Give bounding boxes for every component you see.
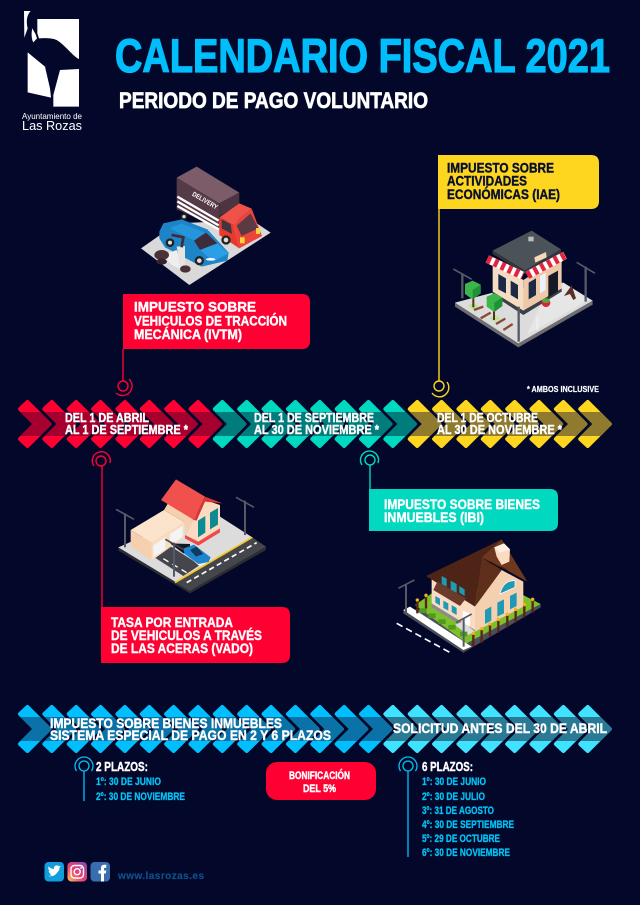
callout: vado xyxy=(101,466,290,663)
timeline: chevrons teal xyxy=(215,402,415,446)
period: abril a septiembre: AL 1 DE SEPTIEMBRE * xyxy=(65,422,189,437)
callout: IBI: IMPUESTO SOBRE BIENES xyxy=(384,496,540,512)
illustration: house with garage xyxy=(116,479,266,593)
period: abril a septiembre: DEL 1 DE ABRIL xyxy=(65,410,149,425)
period: octubre a noviembre: AL 30 DE NOVIEMBRE * xyxy=(437,422,563,437)
callout: IBI: INMUEBLES (IBI) xyxy=(384,509,484,525)
website: www.lasrozas.es xyxy=(117,871,204,882)
period: septiembre a noviembre xyxy=(254,410,380,437)
banner text: sistema especial xyxy=(50,715,331,743)
marker: IVTM xyxy=(116,379,132,396)
list: 6 plazos: 1º: 30 DE JUNIO xyxy=(422,776,486,788)
period: abril a septiembre xyxy=(65,410,189,437)
period: septiembre a noviembre: AL 30 DE NOVIEMBRE * xyxy=(254,422,380,437)
logo: Ayuntamiento de Las Rozas: Las Rozas xyxy=(22,118,82,133)
callout: IAE: ECONÓMICAS (IAE) xyxy=(447,185,560,202)
period: septiembre a noviembre: DEL 1 DE SEPTIEMBRE xyxy=(254,410,374,425)
list: 6 plazos: 2º: 30 DE JULIO xyxy=(422,791,485,803)
callout: vado: DE LAS ACERAS (VADO) xyxy=(111,640,253,656)
list: 2 plazos xyxy=(75,757,185,803)
list: 6 plazos: 3º: 31 DE AGOSTO xyxy=(422,805,494,817)
banner text: sistema especial: IMPUESTO SOBRE BIENES INMUEBLES xyxy=(50,715,282,731)
badge: bonificación: DEL 5% xyxy=(303,783,336,795)
illustration: chalet xyxy=(397,539,541,654)
callout: IVTM: VEHICULOS DE TRACCIÓN xyxy=(134,312,287,328)
callout: vado: DE VEHICULOS A TRAVÉS xyxy=(111,627,262,643)
illustration: shop xyxy=(453,231,595,347)
callout: IBI xyxy=(369,465,558,531)
list: 6 plazos xyxy=(399,757,514,859)
list: 2 plazos: 2º: 30 DE NOVIEMBRE xyxy=(96,791,185,803)
timeline: chevrons yellow xyxy=(410,402,610,446)
marker: IBI xyxy=(361,451,379,465)
banner text: sistema especial: SISTEMA ESPECIAL DE PAGO EN 2 Y 6 PLAZOS xyxy=(50,727,331,743)
list: 6 plazos: 6 PLAZOS: xyxy=(422,760,473,774)
badge: bonificación xyxy=(266,762,376,800)
marker: IAE xyxy=(432,381,449,397)
callout: IAE xyxy=(438,155,599,381)
icon: instagram xyxy=(68,862,87,882)
callout: IVTM: MECÁNICA (IVTM) xyxy=(134,326,242,342)
icon: facebook xyxy=(90,862,110,882)
icon: twitter xyxy=(44,862,64,882)
marker: vado xyxy=(92,452,110,466)
note: ambos inclusive: * AMBOS INCLUSIVE xyxy=(527,384,599,394)
callout: IAE: ACTIVIDADES xyxy=(447,172,527,188)
badge: bonificación: BONIFICACIÓN xyxy=(289,769,350,782)
timeline: chevrons red xyxy=(20,402,220,446)
list: 6 plazos: 4º: 30 DE SEPTIEMBRE xyxy=(422,819,514,831)
illustration: vehicles: DELIVERY xyxy=(191,191,219,211)
subtitle: PERIODO DE PAGO VOLUNTARIO xyxy=(119,88,428,113)
list: 2 plazos: 2 PLAZOS: xyxy=(96,760,148,774)
list: 2 plazos: 1º: 30 DE JUNIO xyxy=(96,776,161,788)
illustration: vehicles xyxy=(141,167,271,285)
banner text: solicitud: SOLICITUD ANTES DEL 30 DE ABRIL xyxy=(393,720,607,736)
timeline: chevrons light cyan xyxy=(385,707,610,751)
logo: Ayuntamiento de Las Rozas xyxy=(22,11,82,133)
callout: IVTM xyxy=(123,294,310,381)
list: 6 plazos: 6º: 30 DE NOVIEMBRE xyxy=(422,847,510,859)
list: 6 plazos: 5º: 29 DE OCTUBRE xyxy=(422,833,500,845)
timeline: chevrons blue xyxy=(20,707,391,751)
logo: Ayuntamiento de Las Rozas: Ayuntamiento de xyxy=(22,111,82,121)
period: octubre a noviembre: DEL 1 DE OCTUBRE xyxy=(437,410,538,425)
callout: vado: TASA POR ENTRADA xyxy=(111,614,233,630)
callout: IVTM: IMPUESTO SOBRE xyxy=(134,298,256,314)
period: octubre a noviembre xyxy=(437,410,563,437)
callout: IAE: IMPUESTO SOBRE xyxy=(447,160,554,176)
